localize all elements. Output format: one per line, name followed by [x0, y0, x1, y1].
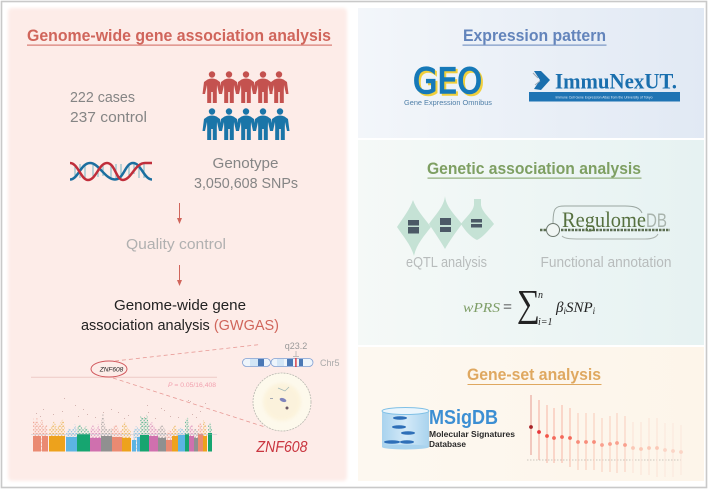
formula: wPRS: β — [556, 300, 563, 316]
heading: gene-set analysis: Gene-set analysis — [467, 365, 601, 384]
logo: GEO: Gene Expression Omnibus — [404, 98, 492, 107]
text: GWGAS: association analysis (GWGAS) — [81, 318, 279, 334]
panel: expression pattern — [358, 8, 704, 138]
text: sample sizes — [70, 90, 147, 126]
solid columns — [33, 433, 212, 452]
formula: wPRS: wPRS — [463, 301, 500, 316]
text: eQTL analysis: eQTL analysis — [406, 255, 487, 271]
logo: ImmuNexUT: Immune Cell Gene Expression Atlas from the University of Tokyo — [556, 96, 653, 100]
logo: GEO: GEO — [415, 64, 484, 104]
top gene callout — [91, 361, 127, 377]
text: ZNF608: ZNF608 — [256, 439, 308, 456]
formula: wPRS — [463, 283, 596, 328]
formula: wPRS: i — [563, 306, 566, 316]
formula: wPRS: ∑ — [517, 283, 540, 325]
panel: gene-set analysis — [358, 347, 704, 481]
arrow: to GWGAS — [177, 265, 182, 286]
formula: wPRS: n — [538, 290, 543, 301]
text: quality control: Quality control — [126, 237, 226, 253]
icon: control people — [202, 108, 290, 140]
formula: wPRS: i=1 — [538, 317, 553, 328]
logo: MSigDB — [382, 407, 515, 450]
chart: manhattan plot — [31, 361, 217, 452]
icon: case people — [202, 71, 288, 103]
logo: ImmuNexUT: ImmuNexUT. — [555, 68, 677, 94]
icon: locus marker — [293, 351, 299, 356]
chart: enrichment lollipop — [527, 395, 683, 477]
heading: expression pattern: Expression pattern — [463, 26, 606, 45]
text: functional annotation: Functional annotation — [540, 255, 672, 271]
arrow: to quality control — [177, 203, 182, 224]
logo: RegulomeDB: Regulome — [562, 207, 646, 232]
logo: MSigDB: MSigDB — [429, 407, 498, 429]
formula: wPRS: = — [503, 299, 512, 316]
text: genotype: 3,050,608 SNPs — [194, 176, 298, 192]
text: q23.2: q23.2 — [285, 341, 307, 351]
text: sample sizes: 222 cases — [70, 90, 135, 106]
logo: RegulomeDB: DB — [646, 211, 667, 232]
speckled columns — [33, 412, 212, 451]
text: sample sizes: 237 control — [70, 110, 147, 126]
panel: genetic association analysis — [358, 140, 704, 345]
text: genotype — [194, 156, 298, 192]
formula: wPRS: i — [593, 306, 596, 316]
dashed zoom lines — [113, 344, 265, 427]
icon: DNA helix — [70, 163, 152, 180]
logo: ImmuNexUT — [529, 68, 680, 102]
tissue image — [253, 373, 311, 431]
heading: genetic association analysis: Genetic association analysis — [427, 159, 641, 178]
text: GWGAS — [81, 298, 279, 334]
text: GWGAS: Genome-wide gene — [114, 298, 246, 314]
logo: RegulomeDB — [540, 206, 670, 239]
text: genotype: Genotype — [212, 156, 278, 172]
icon: eQTL violins — [397, 196, 494, 256]
panel: genome-wide gene association analysis — [8, 8, 347, 481]
logo: MSigDB: Database — [429, 440, 466, 449]
top gene callout: ZNF608 — [99, 366, 124, 374]
text: Chr5: Chr5 — [320, 358, 340, 368]
threshold label: P = 0.05/16,408 — [168, 382, 216, 389]
icon: chromosome 5 — [242, 358, 313, 367]
faint tall points — [36, 398, 206, 419]
formula: wPRS: SNP — [566, 300, 593, 316]
significance threshold — [31, 376, 217, 379]
logo: GEO: GEO — [413, 62, 482, 102]
heading: genome-wide: Genome-wide gene association analysis — [27, 26, 331, 45]
logo: MSigDB: Molecular Signatures — [429, 430, 515, 439]
